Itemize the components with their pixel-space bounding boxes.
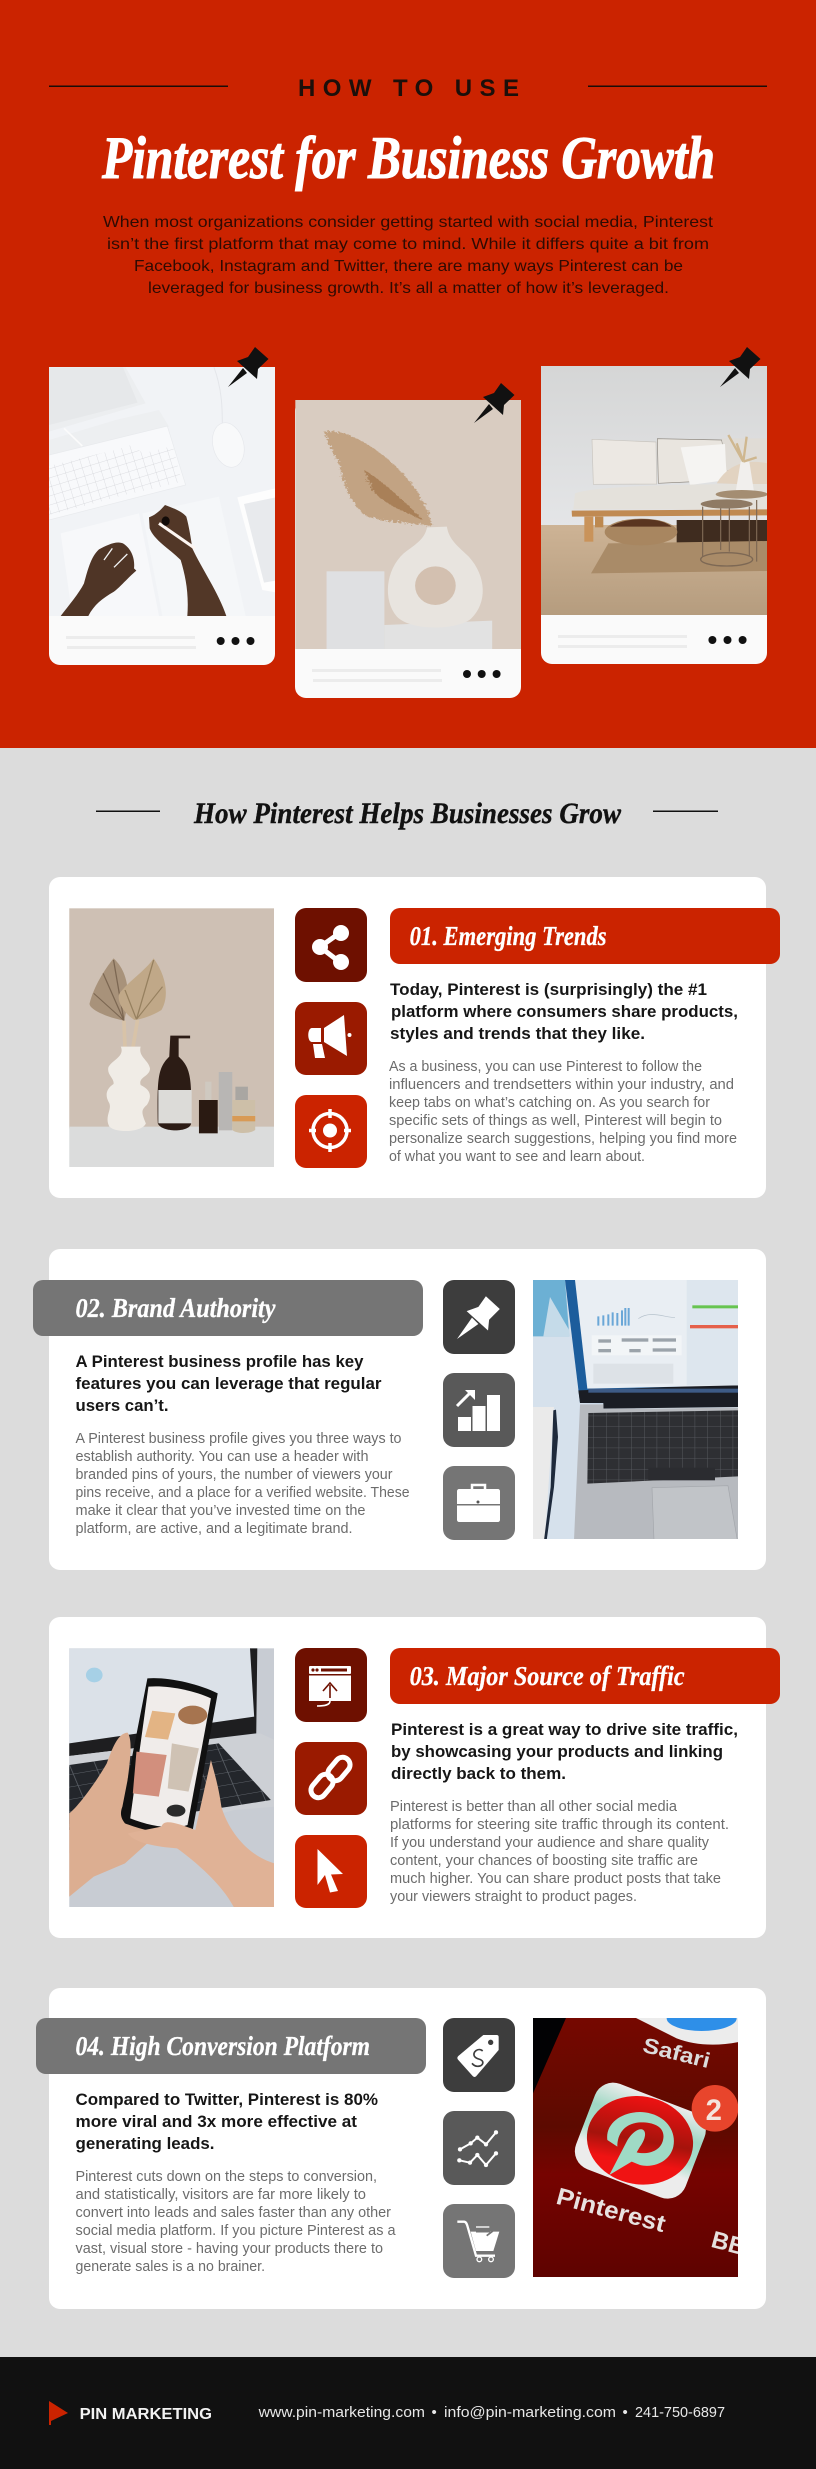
body text: and statistically, visitors are far more likely to <box>76 2187 366 2203</box>
body text <box>76 2169 396 2275</box>
contact details: 241-750-6897 <box>635 2404 725 2421</box>
body text: platforms for steering site traffic through its content. <box>390 1817 729 1833</box>
body text: much higher. You can share product posts that take <box>390 1871 721 1887</box>
lead text: by showcasing your products and linking <box>391 1743 723 1761</box>
body text: As a business, you can use Pinterest to follow the <box>389 1059 702 1075</box>
photo: vase, palm leaves and bottles <box>69 908 274 1167</box>
icon: share <box>295 908 367 982</box>
body text: personalize search suggestions, helping you find more <box>389 1131 737 1147</box>
pin card: desk <box>49 367 276 665</box>
body text <box>390 1799 729 1905</box>
intro paragraph <box>103 214 714 297</box>
lead text: A Pinterest business profile has key <box>76 1353 364 1371</box>
panel: 03 major source of traffic <box>49 1617 780 1938</box>
icon: trend lines <box>443 2111 515 2185</box>
lead text: Pinterest is a great way to drive site traffic, <box>391 1721 738 1739</box>
icon: push pin <box>228 347 268 387</box>
contact details: www.pin-marketing.com <box>258 2404 425 2421</box>
body text: influencers and trendsetters within your industry, and <box>389 1077 734 1093</box>
lead text <box>390 981 738 1043</box>
lead text <box>391 1721 738 1783</box>
photo: desk with keyboard and hands <box>49 367 276 617</box>
contact details <box>258 2404 725 2421</box>
lead text: Compared to Twitter, Pinterest is 80% <box>76 2091 378 2109</box>
body text: Pinterest cuts down on the steps to conversion, <box>76 2169 377 2185</box>
photo: Pinterest app on phone screen: Safari <box>640 2033 713 2073</box>
panel: 02 brand authority <box>33 1249 766 1570</box>
photo: vase with pampas grass <box>295 400 521 650</box>
icon: push pin <box>443 1280 515 1354</box>
body text: Pinterest is better than all other social media <box>390 1799 678 1815</box>
icon: price tag <box>443 2018 515 2092</box>
body text: of what you want to see and learn about. <box>389 1149 645 1165</box>
body text: pins receive, and a place for a verified website. These <box>76 1485 410 1501</box>
pin card: vase <box>295 400 521 698</box>
body text: specific sets of things as well, Pinterest will begin to <box>389 1113 722 1129</box>
banner: 04 high conversion platform <box>36 2018 426 2074</box>
banner: 02 brand authority: 02. Brand Authority <box>76 1293 276 1323</box>
hero panel <box>0 0 816 748</box>
body text: platform, are active, and a legitimate brand. <box>76 1521 352 1537</box>
icon: rising bar chart <box>443 1373 515 1447</box>
banner: 04 high conversion platform: 04. High Conversion Platform <box>76 2031 370 2061</box>
body text: If you understand your audience and share quality <box>390 1835 710 1851</box>
icon: push pin <box>474 383 514 423</box>
icon: cursor arrow <box>295 1835 367 1908</box>
body text: branded pins of yours, the number of viewers your <box>76 1467 393 1483</box>
icon: briefcase <box>443 1466 515 1540</box>
icon: target <box>295 1095 367 1168</box>
card footer bars and dots <box>558 635 747 648</box>
footer <box>0 2357 816 2469</box>
contact details: • <box>622 2404 628 2421</box>
body text: content, your chances of boosting site traffic are <box>390 1853 698 1869</box>
body text <box>76 1431 410 1537</box>
body text <box>389 1059 737 1165</box>
contact details: • <box>432 2404 437 2421</box>
lead text: styles and trends that they like. <box>390 1025 645 1043</box>
lead text: more viral and 3x more effective at <box>76 2113 358 2131</box>
intro paragraph: Facebook, Instagram and Twitter, there are many ways Pinterest can be <box>134 258 683 275</box>
kicker: how to use: HOW TO USE <box>298 75 519 102</box>
lead text: generating leads. <box>76 2135 214 2153</box>
body text: convert into leads and sales faster than any other <box>76 2205 391 2221</box>
photo: hands holding phone with Pinterest app <box>69 1648 274 1910</box>
intro paragraph: leveraged for business growth. It’s all a matter of how it’s leveraged. <box>148 280 669 297</box>
body text: A Pinterest business profile gives you three ways to <box>76 1431 402 1447</box>
contact details: info@pin-marketing.com <box>444 2404 616 2421</box>
icon: push pin <box>720 347 760 387</box>
intro paragraph: When most organizations consider getting started with social media, Pinterest <box>103 214 714 231</box>
body text: vast, visual store - having your products there to <box>76 2241 383 2257</box>
banner: 02 brand authority <box>33 1280 423 1336</box>
body text: keep tabs on what’s catching on. As you search for <box>389 1095 710 1111</box>
banner: 01 emerging trends: 01. Emerging Trends <box>410 921 607 951</box>
photo: Pinterest app on phone screen <box>533 2006 749 2278</box>
intro paragraph: isn’t the first platform that may come to mind. While it differs quite a bit from <box>107 236 709 253</box>
lead text: users can’t. <box>76 1397 168 1415</box>
panel: 04 high conversion platform <box>36 1988 766 2309</box>
panel: 01 emerging trends <box>49 877 780 1198</box>
photo: Pinterest app on phone screen: Pinterest <box>553 2183 668 2238</box>
lead text <box>76 2091 378 2153</box>
banner: 03 major source of traffic <box>390 1648 780 1704</box>
body text: establish authority. You can use a header with <box>76 1449 368 1465</box>
banner: 03 major source of traffic: 03. Major Source of Traffic <box>410 1661 685 1691</box>
section heading: How Pinterest Helps Businesses Grow <box>193 797 622 830</box>
photo: Pinterest app on phone screen: BB <box>708 2226 749 2261</box>
body text: your viewers straight to product pages. <box>390 1889 637 1905</box>
card footer bars and dots <box>312 669 501 682</box>
icon: chain link <box>295 1742 367 1815</box>
icon: megaphone <box>295 1002 367 1075</box>
brand name: PIN MARKETING <box>80 2406 212 2423</box>
body text: generate sales is a no brainer. <box>76 2259 265 2275</box>
photo: laptop with analytics dashboard <box>533 1280 740 1540</box>
banner: 01 emerging trends <box>390 908 780 964</box>
lead text: Today, Pinterest is (surprisingly) the #1 <box>390 981 707 999</box>
body text: make it clear that you’ve invested time on the <box>76 1503 366 1519</box>
pin card: sofa <box>541 366 768 664</box>
lead text: platform where consumers share products, <box>391 1003 738 1021</box>
icon: red flag <box>49 2401 68 2425</box>
body text: social media platform. If you picture Pinterest as a <box>76 2223 396 2239</box>
card footer bars and dots <box>66 636 254 649</box>
icon: browser with arrow <box>295 1648 367 1722</box>
photo: Pinterest app on phone screen: 2 <box>706 2094 722 2127</box>
lead text: features you can leverage that regular <box>76 1375 382 1393</box>
photo: sofa in living room <box>541 366 768 616</box>
lead text <box>76 1353 382 1415</box>
icon: shopping cart <box>443 2204 515 2278</box>
lead text: directly back to them. <box>391 1765 566 1783</box>
